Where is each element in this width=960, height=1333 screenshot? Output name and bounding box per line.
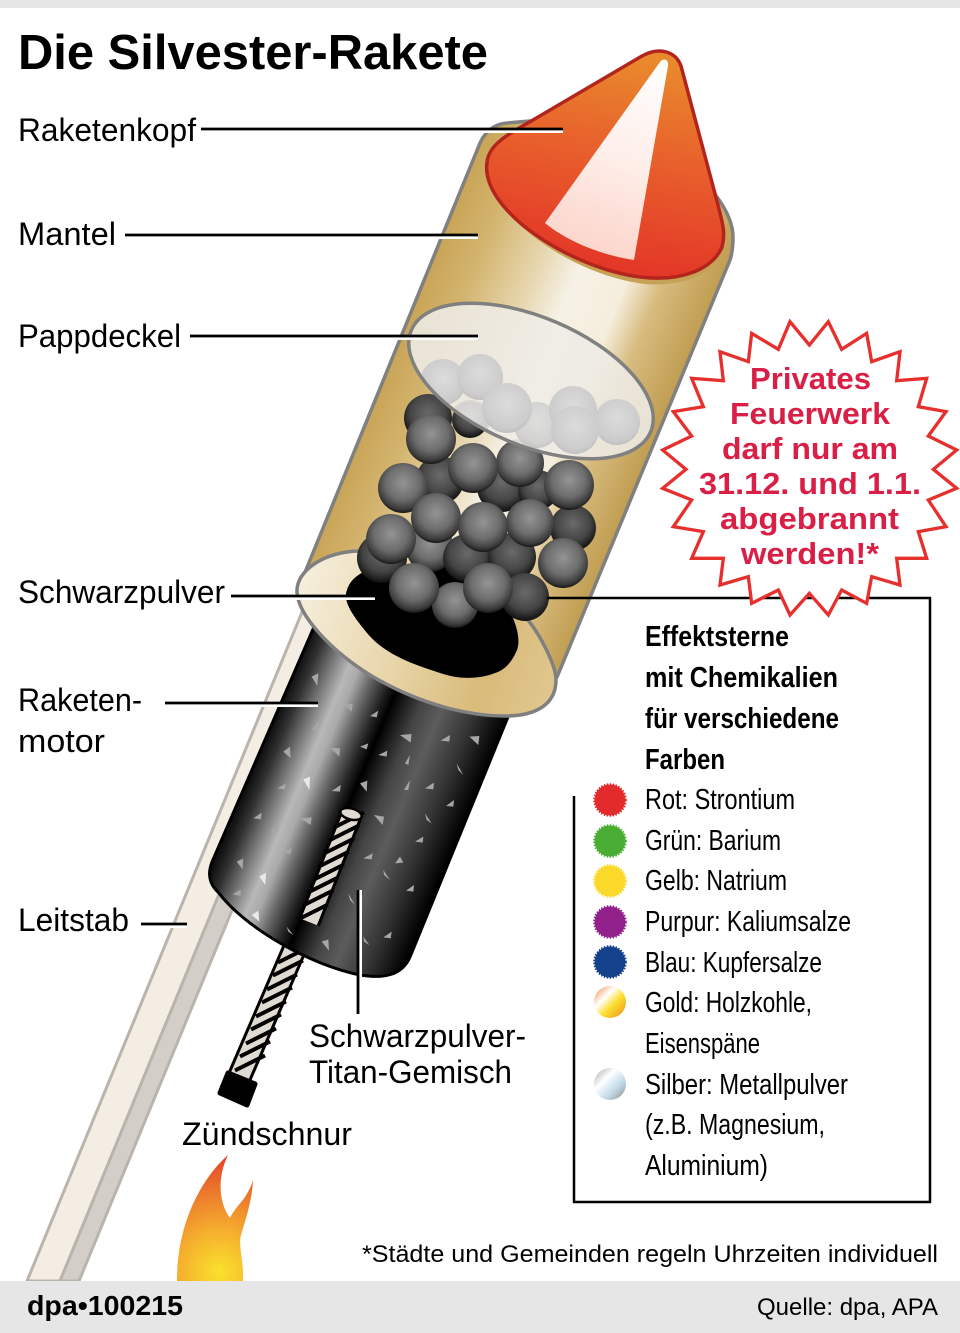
purple text: Purpur: Kaliumsalze: [645, 906, 851, 938]
silver text: [645, 1069, 848, 1182]
rocket head: [485, 51, 724, 284]
label: Raketenmotor: motor: [18, 723, 105, 759]
starburst callout: [663, 322, 957, 615]
gold text: Eisenspäne: [645, 1028, 760, 1060]
highlight on head: [545, 59, 668, 260]
footnote: *Städte und Gemeinden regeln Uhrzeiten individuell: [362, 1241, 938, 1268]
lower fuse: [220, 948, 308, 1105]
legend heading: für verschiedene: [645, 703, 839, 735]
callout text: Privates: [750, 361, 871, 396]
green dot: [594, 825, 626, 857]
open end of mantle: [297, 551, 556, 716]
rocket motor: [210, 590, 530, 976]
callout text: werden!*: [740, 536, 880, 571]
stars behind the lid: [420, 354, 640, 454]
upper fuse: [298, 806, 364, 922]
effect stars: [357, 394, 596, 628]
label: Schwarzpulver-Titan-Gemisch: Schwarzpulver-: [309, 1018, 526, 1054]
red text: Rot: Strontium: [645, 784, 795, 816]
callout text: Feuerwerk: [730, 396, 891, 431]
blue text: Blau: Kupfersalze: [645, 947, 822, 979]
silver text: Aluminium): [645, 1150, 768, 1182]
flame: [177, 1155, 253, 1281]
label: Leitstab: Leitstab: [18, 902, 129, 938]
top band: [0, 0, 960, 8]
legend colour list: [594, 784, 851, 1182]
titanium flakes: [233, 673, 479, 951]
label: Schwarzpulver: Schwarzpulver: [18, 574, 225, 610]
callout text: darf nur am: [722, 431, 898, 466]
legend heading: mit Chemikalien: [645, 662, 838, 694]
legend heading: [645, 621, 839, 776]
footer band: [0, 1281, 960, 1333]
red dot: [594, 784, 626, 816]
blue dot: [594, 946, 626, 978]
label: Schwarzpulver-Titan-Gemisch: Titan-Gemisch: [309, 1054, 512, 1090]
black powder opening: [346, 560, 518, 678]
title: Die Silvester-Rakete: [18, 26, 488, 80]
label: Raketenmotor: [18, 682, 142, 759]
leader lines: [125, 129, 563, 1014]
silver dot: [594, 1068, 626, 1100]
label: Mantel: Mantel: [18, 216, 116, 252]
yellow text: Gelb: Natrium: [645, 865, 787, 897]
legend heading: Farben: [645, 744, 725, 776]
agency credit: dpa•100215: [27, 1290, 183, 1321]
legend box outline: [547, 598, 930, 1202]
guide stick: [27, 600, 360, 1281]
gold text: [645, 987, 812, 1060]
label: Raketenmotor: Raketen-: [18, 682, 142, 718]
callout text: 31.12. und 1.1.: [699, 466, 921, 501]
gold dot: [594, 986, 626, 1018]
label: Raketenkopf: Raketenkopf: [18, 112, 196, 148]
label: Pappdeckel: Pappdeckel: [18, 318, 181, 354]
label: Zündschnur: Zündschnur: [182, 1116, 352, 1152]
legend heading: Effektsterne: [645, 621, 789, 653]
source: Quelle: dpa, APA: [757, 1294, 938, 1321]
label: Schwarzpulver-Titan-Gemisch: [309, 1018, 526, 1090]
silver text: Silber: Metallpulver: [645, 1069, 848, 1101]
cardboard lid: [407, 302, 655, 460]
silver text: (z.B. Magnesium,: [645, 1109, 825, 1141]
gold text: Gold: Holzkohle,: [645, 987, 812, 1019]
callout text: [699, 361, 921, 571]
green text: Grün: Barium: [645, 825, 781, 857]
callout text: abgebrannt: [720, 501, 899, 536]
rocket mantle: [297, 121, 733, 677]
yellow dot: [594, 865, 626, 897]
purple dot: [594, 906, 626, 938]
